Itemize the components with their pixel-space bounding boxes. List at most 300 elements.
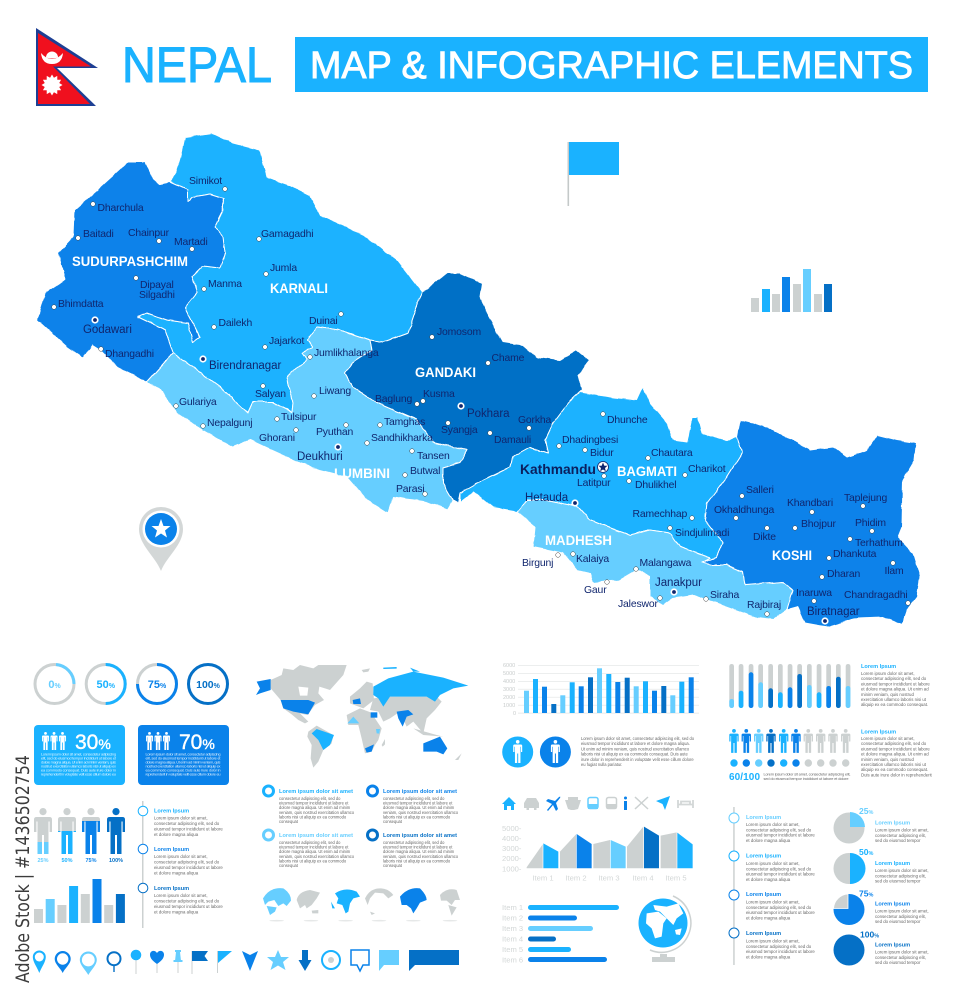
timeline: three steps: Lorem Ipsum bbox=[154, 847, 189, 853]
legend item 4 bbox=[368, 830, 459, 868]
timeline: four steps: consectetur adipiscing elit, sed do bbox=[746, 944, 812, 949]
city labels: Salleri bbox=[746, 485, 774, 496]
city labels: Siraha bbox=[710, 590, 740, 601]
banner: map and infographic elements: MAP & INFOGRAPHIC ELEMENTS bbox=[310, 45, 913, 87]
timeline: four steps: Lorem ipsum dolor sit amet, bbox=[746, 822, 800, 827]
timeline: four steps: et dolore magna aliqua bbox=[746, 954, 791, 959]
pie: 75 percent: Lorem ipsum dolor sit amet, bbox=[875, 908, 929, 914]
timeline: four steps: Lorem Ipsum bbox=[746, 854, 781, 860]
icon: dark flag bbox=[192, 951, 208, 974]
panel: 30 percent: elit, sed do eiusmod tempor incididunt ut labore et bbox=[41, 756, 117, 760]
pie: 100 percent bbox=[834, 930, 929, 966]
column chart: top middle: 6000 bbox=[503, 663, 515, 669]
icon: arrowhead marker bbox=[242, 951, 258, 971]
legend item 3: laboris nisi ut aliquip ex ea commodo bbox=[279, 858, 347, 863]
timeline: three steps: eiusmod tempor incididunt ut labore bbox=[154, 865, 223, 870]
city labels: Birgunj bbox=[522, 558, 553, 569]
legend item 2: dolore magna aliqua. Ut enim ad minim bbox=[383, 805, 455, 810]
legend item 3: Lorem ipsum dolor sit amet bbox=[279, 833, 353, 839]
legend item 2: eiusmod tempor incididunt ut labore et bbox=[383, 801, 453, 806]
icon: ship bbox=[565, 797, 581, 810]
pie: 50 percent: 50% bbox=[859, 847, 873, 857]
people pictogram: 60 of 100: Lorem ipsum dolor sit amet, consectetur adipiscing elit, bbox=[764, 772, 850, 776]
city labels bbox=[58, 176, 907, 611]
pie: 100 percent: sed do eiusmod tempor bbox=[875, 960, 921, 965]
legend item 4: dolore magna aliqua. Ut enim ad minim bbox=[383, 849, 455, 854]
male icons with paragraph: Lorem ipsum dolor sit amet, consectetur adipiscing elit, sed do bbox=[581, 736, 695, 741]
pie: 25 percent: consectetur adipiscing elit, bbox=[875, 833, 926, 838]
city labels: Baglung bbox=[375, 394, 412, 405]
pie: 100 percent: consectetur adipiscing elit, bbox=[875, 955, 926, 960]
panel: 70 percent: nostrud exercitation ullamco laboris nisi ut aliquip ex bbox=[146, 764, 221, 768]
area chart: 5000- bbox=[502, 824, 522, 833]
icon: heart pin bbox=[150, 951, 164, 973]
panel: 70 percent: dolore magna aliqua. Ut enim ad minim veniam, quis bbox=[146, 760, 221, 764]
province labels: BAGMATI bbox=[617, 464, 677, 479]
city labels: Kalaiya bbox=[576, 554, 609, 565]
city labels: Sindjulimadi bbox=[675, 528, 729, 539]
province labels: KOSHI bbox=[772, 548, 812, 563]
people pictogram: 60 of 100: Lorem Ipsum bbox=[861, 730, 896, 736]
capital labels: Godawari bbox=[83, 324, 132, 336]
timeline: four steps: Lorem Ipsum bbox=[746, 892, 781, 898]
pie: 50 percent: Lorem Ipsum bbox=[875, 861, 910, 867]
column chart: top middle bbox=[503, 663, 699, 717]
region: Koshi bbox=[702, 420, 920, 627]
city labels: Martadi bbox=[174, 237, 208, 248]
mini bar chart icon bbox=[751, 269, 832, 312]
legend item 1: Lorem ipsum dolor sit amet bbox=[279, 789, 353, 795]
icon: pin 3 bbox=[80, 952, 97, 975]
legend item 1: eiusmod tempor incididunt ut labore et bbox=[279, 801, 349, 806]
timeline: three steps: consectetur adipiscing elit, sed do bbox=[154, 898, 220, 904]
male icons with paragraph: laboris nisi ut aliquip ex ea commodo consequat. Duis aute bbox=[581, 752, 688, 757]
timeline: four steps: consectetur adipiscing elit, sed do bbox=[746, 827, 812, 832]
legend item 3: dolore magna aliqua. Ut enim ad minim bbox=[279, 849, 351, 854]
rounded column chart: top right: consectetur adipiscing elit, sed do bbox=[861, 676, 927, 681]
map of Nepal provinces bbox=[37, 133, 920, 627]
city labels: Terhathum bbox=[855, 538, 903, 549]
timeline: three steps: Lorem ipsum dolor sit amet, bbox=[154, 816, 208, 820]
area chart: Item 4 bbox=[632, 874, 654, 882]
people percentage chart: 100% bbox=[109, 858, 123, 864]
male icons with paragraph: Ut enim ad minim veniam, quis nostrud exercitation ullamco bbox=[581, 746, 690, 751]
ring: 75 percent: 75% bbox=[148, 679, 167, 691]
timeline: three steps: Lorem Ipsum bbox=[154, 886, 189, 892]
people pictogram: 60 of 100 bbox=[729, 729, 933, 783]
city labels: Manma bbox=[208, 279, 242, 290]
area chart: 4000- bbox=[502, 834, 522, 843]
legend item 4: eiusmod tempor incididunt ut labore et bbox=[383, 845, 453, 850]
timeline: four steps: Lorem Ipsum bbox=[746, 815, 781, 821]
icon: plane bbox=[546, 797, 560, 811]
vertical stock credit: Adobe Stock | #1436502754 bbox=[12, 755, 34, 983]
city labels: Chautara bbox=[651, 448, 693, 459]
pie: 75 percent: Lorem Ipsum bbox=[875, 902, 910, 908]
column chart: top middle: 3000 bbox=[503, 687, 515, 693]
bar chart: bottom left bbox=[34, 879, 125, 923]
rounded column chart: top right bbox=[729, 664, 930, 708]
city labels: Parasi bbox=[396, 484, 425, 495]
city labels: Dipayal bbox=[140, 280, 174, 291]
male icons with paragraph: eiusmod tempor incididunt ut labore et dolore magna aliqua. bbox=[581, 741, 690, 746]
city labels: Dhadingbesi bbox=[562, 435, 618, 446]
legend item 3: veniam, quis nostrud exercitation ullamco bbox=[279, 854, 355, 859]
legend item 2: laboris nisi ut aliquip ex ea commodo bbox=[383, 814, 451, 819]
pie: 75 percent: 75% bbox=[859, 888, 873, 898]
horizontal bar chart: Item 1 bbox=[502, 903, 523, 912]
legend item 4: veniam, quis nostrud exercitation ullamco bbox=[383, 854, 459, 859]
legend block: four text items bbox=[264, 786, 459, 868]
ring: 50 percent bbox=[86, 664, 125, 704]
city markers bbox=[52, 187, 910, 616]
column chart: top middle: 2000 bbox=[503, 695, 515, 701]
city labels: Okhaldhunga bbox=[714, 505, 775, 516]
timeline: three steps: et dolore magna aliqua bbox=[154, 832, 199, 837]
city labels: Kusma bbox=[423, 389, 455, 400]
people pictogram: 60 of 100: et dolore magna aliqua. Ut enim ad bbox=[861, 752, 929, 757]
timeline: four steps: et dolore magna aliqua bbox=[746, 915, 791, 920]
rounded column chart: top right: Lorem Ipsum bbox=[861, 664, 896, 670]
icon: outlined speech bubble bbox=[351, 950, 369, 971]
timeline: three steps: Lorem Ipsum bbox=[154, 808, 189, 814]
legend item 2 bbox=[368, 786, 459, 824]
capital labels: Hetauda bbox=[525, 492, 569, 504]
pie: 75 percent: sed do eiusmod tempor bbox=[875, 919, 921, 924]
legend item 4: consequat bbox=[383, 863, 403, 868]
ring: 50 percent: 50% bbox=[96, 679, 116, 691]
timeline: four steps: et dolore magna aliqua bbox=[746, 838, 791, 843]
legend item 1: veniam, quis nostrud exercitation ullamco bbox=[279, 810, 355, 815]
icon: fork and knife bbox=[635, 797, 648, 809]
panel: 70 percent bbox=[138, 725, 229, 785]
icon: national capital star bbox=[598, 462, 608, 472]
timeline: three steps: consectetur adipiscing elit, sed do bbox=[154, 860, 220, 864]
ring: 0 percent: 0% bbox=[48, 679, 61, 691]
city labels: Rajbiraj bbox=[747, 600, 781, 611]
region: Gandaki bbox=[345, 273, 590, 502]
city labels: Ilam bbox=[884, 566, 904, 577]
column chart: top middle: 1000 bbox=[503, 703, 515, 709]
panel: 30 percent bbox=[34, 725, 125, 785]
globe 6 bbox=[440, 889, 460, 916]
city labels: Tulsipur bbox=[281, 412, 317, 423]
pie: 75 percent: consectetur adipiscing elit, bbox=[875, 914, 926, 919]
legend item 2: Lorem ipsum dolor sit amet bbox=[383, 789, 457, 795]
legend item 2: consectetur adipiscing elit, sed do bbox=[383, 796, 445, 801]
icon: bed bbox=[678, 800, 693, 808]
horizontal bar chart: Item 4 bbox=[502, 934, 523, 944]
people pictogram: 60 of 100: Lorem ipsum dolor sit amet, bbox=[861, 736, 915, 741]
rounded column chart: top right: exercitation ullamco laboris nisi ut bbox=[861, 697, 927, 702]
pie: 50 percent: sed do eiusmod tempor bbox=[875, 878, 921, 884]
city labels: Baitadi bbox=[83, 229, 114, 240]
legend item 2: veniam, quis nostrud exercitation ullamco bbox=[383, 810, 459, 815]
region: Bagmati bbox=[460, 387, 742, 563]
people pictogram: 60 of 100: exercitation ullamco laboris nisi ut bbox=[861, 762, 927, 767]
capital labels bbox=[83, 324, 860, 618]
city labels: Ramechhap bbox=[632, 509, 688, 520]
icon: navigation arrow bbox=[656, 796, 670, 810]
horizontal bar chart: Item 5 bbox=[502, 945, 523, 954]
city labels: Bhojpur bbox=[801, 519, 836, 530]
panel: 30 percent: 30% bbox=[75, 731, 111, 754]
legend item 3: consectetur adipiscing elit, sed do bbox=[279, 840, 341, 845]
panel: 30 percent: nostrud exercitation ullamco laboris nisi ut aliquip ex bbox=[41, 764, 116, 768]
icon: down arrow bbox=[298, 950, 312, 971]
globe 4 bbox=[365, 888, 393, 915]
city labels: Pyuthan bbox=[316, 427, 353, 438]
city labels: Dhankuta bbox=[833, 549, 877, 560]
pie: 100 percent: 100% bbox=[860, 930, 879, 940]
horizontal bar chart: Item 3 bbox=[502, 924, 523, 933]
pie: 25 percent: sed do eiusmod tempor bbox=[875, 838, 921, 843]
icon: thumbtack bbox=[174, 950, 182, 973]
city labels: Dhangadhi bbox=[105, 349, 154, 360]
timeline: four steps: Lorem ipsum dolor sit amet, bbox=[746, 900, 800, 904]
pie: 25 percent: Lorem ipsum dolor sit amet, bbox=[875, 828, 929, 832]
male icons with paragraph: eu fugiat nulla pariatur. bbox=[581, 762, 622, 767]
globe 2 bbox=[297, 890, 320, 913]
timeline: three steps: Lorem ipsum dolor sit amet, bbox=[154, 854, 208, 859]
city labels: Jajarkot bbox=[269, 336, 304, 347]
horizontal bar chart: Item 2 bbox=[502, 914, 523, 922]
icon: man circle 1 bbox=[502, 736, 533, 768]
timeline: four steps: Lorem ipsum dolor sit amet, bbox=[746, 938, 800, 944]
city labels: Ghorani bbox=[259, 433, 295, 444]
city labels: Sandhikharka bbox=[371, 433, 433, 444]
timeline: four steps: eiusmod tempor incididunt ut labore bbox=[746, 833, 815, 838]
icon: car bbox=[524, 798, 539, 810]
ring: 100 percent bbox=[188, 664, 228, 704]
timeline: four steps bbox=[729, 807, 815, 965]
city labels: Simikot bbox=[189, 176, 222, 187]
globe 1 bbox=[263, 888, 291, 915]
city labels: Butwal bbox=[410, 466, 440, 477]
city labels: Inaruwa bbox=[796, 588, 832, 599]
people pictogram: 60 of 100: sed do eiusmod tempor incididunt ut labore et dolore bbox=[764, 776, 848, 781]
legend item 3: consequat bbox=[279, 863, 299, 868]
progress rings bbox=[35, 664, 228, 704]
column chart: top middle: 4000 bbox=[503, 679, 515, 685]
city labels: Jaleswor bbox=[618, 599, 658, 610]
icon: man circle 2 bbox=[540, 736, 571, 768]
timeline: three steps: et dolore magna aliqua bbox=[154, 870, 199, 876]
icon: light pennant flag bbox=[217, 951, 232, 973]
panel: 70 percent: ea commodo consequat. Duis aute irure dolor in bbox=[146, 768, 220, 772]
capital labels: Birendranagar bbox=[209, 360, 281, 372]
flag of Nepal bbox=[36, 28, 98, 106]
legend item 1: consequat bbox=[279, 819, 299, 824]
male icons with paragraph: irure dolor in reprehenderit in voluptate velit esse cillum dolore bbox=[581, 757, 694, 762]
panel: 30 percent: reprehenderit in voluptate velit esse cillum dolore eu bbox=[41, 772, 116, 776]
panel: 30 percent: ea commodo consequat. Duis aute irure dolor in bbox=[41, 768, 116, 772]
timeline: four steps: Lorem Ipsum bbox=[746, 931, 781, 937]
legend item 4: laboris nisi ut aliquip ex ea commodo bbox=[383, 858, 451, 863]
ring: 75 percent bbox=[138, 664, 176, 704]
pie: 25 percent: 25% bbox=[859, 806, 873, 816]
icon: desk globe bbox=[638, 896, 691, 962]
region: Karnali bbox=[138, 133, 422, 413]
rounded column chart: top right: eiusmod tempor incididunt ut labore bbox=[861, 681, 930, 686]
city labels: Chame bbox=[492, 353, 525, 364]
legend item 4: consectetur adipiscing elit, sed do bbox=[383, 840, 445, 845]
city labels: Tamghas bbox=[384, 417, 425, 428]
world map bbox=[256, 665, 468, 768]
city labels: Chandragadhi bbox=[844, 590, 907, 601]
icon: house bbox=[502, 797, 516, 810]
region: Madhesh bbox=[517, 500, 793, 620]
timeline: three steps: eiusmod tempor incididunt ut labore bbox=[154, 826, 223, 832]
panel: 70 percent: 70% bbox=[179, 731, 215, 754]
legend item 4: Lorem ipsum dolor sit amet bbox=[383, 833, 457, 839]
provincial capital markers bbox=[91, 316, 829, 625]
area chart: 2000- bbox=[502, 854, 522, 863]
icon: location pin with star bbox=[139, 507, 183, 571]
timeline: four steps: eiusmod tempor incididunt ut labore bbox=[746, 872, 815, 877]
pie: 50 percent: consectetur adipiscing elit, bbox=[875, 873, 926, 878]
timeline: three steps bbox=[138, 801, 223, 928]
province labels bbox=[72, 254, 812, 563]
globe 3 bbox=[331, 890, 360, 913]
timeline: four steps: eiusmod tempor incididunt ut labore bbox=[746, 910, 815, 915]
timeline: four steps: consectetur adipiscing elit, sed do bbox=[746, 866, 812, 871]
icon: bus bbox=[588, 798, 598, 809]
pie charts bbox=[834, 806, 929, 966]
city labels: Bhimdatta bbox=[58, 299, 104, 310]
timeline: three steps: et dolore magna aliqua bbox=[154, 910, 199, 914]
rounded column chart: top right: et dolore magna aliqua. Ut enim ad bbox=[861, 687, 929, 692]
people pictogram: 60 of 100: Duis aute irure dolor in reprehenderit bbox=[861, 772, 933, 777]
province labels: GANDAKI bbox=[415, 365, 476, 380]
capital labels: Biratnagar bbox=[807, 606, 860, 618]
globe shadows bbox=[269, 920, 457, 921]
area chart: 3000- bbox=[502, 844, 522, 853]
horizontal bar chart bbox=[502, 903, 619, 964]
legend item 1: consectetur adipiscing elit, sed do bbox=[279, 796, 341, 801]
capital labels: Deukhuri bbox=[297, 451, 343, 463]
area chart: Item 1 bbox=[532, 874, 554, 882]
city labels: Dharchula bbox=[98, 203, 144, 214]
pie: 50 percent: Lorem ipsum dolor sit amet, bbox=[875, 868, 929, 873]
ring: 0 percent bbox=[35, 664, 74, 704]
icon: target bbox=[322, 951, 340, 969]
people percentage chart: 75% bbox=[85, 858, 97, 864]
icon: pin 4 bbox=[108, 952, 120, 972]
city labels: Nepalgunj bbox=[207, 418, 252, 429]
city labels: Jumla bbox=[270, 263, 297, 274]
male icons with paragraph bbox=[502, 736, 695, 768]
legend item 1: laboris nisi ut aliquip ex ea commodo bbox=[279, 814, 347, 819]
city labels: Chainpur bbox=[128, 228, 170, 239]
title: country name: NEPAL bbox=[122, 37, 272, 93]
rounded column chart: top right: Lorem ipsum dolor sit amet, bbox=[861, 671, 915, 676]
region: Sudurpashchim bbox=[37, 162, 225, 382]
legend item 3 bbox=[264, 830, 355, 868]
pie: 25 percent bbox=[834, 806, 929, 844]
city labels: Damauli bbox=[494, 435, 531, 446]
city labels: Gamagadhi bbox=[261, 229, 313, 240]
city labels: Dailekh bbox=[218, 318, 252, 329]
pie: 100 percent: Lorem Ipsum bbox=[875, 942, 910, 948]
timeline: four steps: et dolore magna aliqua bbox=[746, 877, 791, 882]
pie: 100 percent: Lorem ipsum dolor sit amet, bbox=[875, 950, 929, 954]
timeline: three steps: eiusmod tempor incididunt ut labore bbox=[154, 904, 223, 909]
city labels: Khandbari bbox=[787, 498, 833, 509]
people pictogram: 60 of 100: minim veniam, quis nostrud bbox=[861, 757, 914, 762]
people pictogram: 60 of 100: aliquip ex ea commodo consequat. bbox=[861, 767, 928, 772]
timeline: three steps: Lorem ipsum dolor sit amet, bbox=[154, 893, 208, 898]
pie: 75 percent bbox=[834, 888, 929, 925]
globes row bbox=[263, 888, 460, 921]
city labels: Malangawa bbox=[640, 558, 692, 569]
city labels: Phidim bbox=[855, 518, 886, 529]
city labels: Gaur bbox=[584, 585, 607, 596]
people percentage chart: 25% bbox=[37, 858, 49, 864]
legend item 1: dolore magna aliqua. Ut enim ad minim bbox=[279, 805, 351, 810]
legend item 2: consequat bbox=[383, 819, 403, 824]
city labels: Taplejung bbox=[844, 493, 888, 504]
icon: star bbox=[267, 950, 289, 970]
panel: 30 percent: dolore magna aliqua. Ut enim ad minim veniam, quis bbox=[41, 760, 116, 764]
legend item 3: eiusmod tempor incididunt ut labore et bbox=[279, 845, 349, 850]
city labels: Syangja bbox=[441, 425, 478, 436]
transport icons row bbox=[502, 796, 693, 811]
people pictogram: 60 of 100: consectetur adipiscing elit, sed do bbox=[861, 741, 927, 746]
city labels: Duinai bbox=[309, 316, 338, 327]
city labels: Jumlikhalanga bbox=[314, 348, 379, 359]
timeline: four steps: consectetur adipiscing elit, sed do bbox=[746, 905, 812, 910]
city labels: Gulariya bbox=[179, 397, 217, 408]
pie: 25 percent: Lorem Ipsum bbox=[875, 820, 910, 826]
city labels: Dhunche bbox=[607, 415, 648, 426]
icon: light speech bubble bbox=[379, 950, 399, 971]
city labels: Latitpur bbox=[577, 478, 611, 489]
area chart: 1000- bbox=[502, 864, 522, 874]
panel: 70 percent: elit, sed do eiusmod tempor incididunt ut labore et bbox=[146, 756, 221, 760]
panel: 30 percent: Lorem ipsum dolor sit amet, consectetur adipiscing bbox=[41, 752, 116, 756]
city labels: Silgadhi bbox=[139, 290, 175, 301]
city labels: Tansen bbox=[417, 451, 450, 462]
city labels: Salyan bbox=[255, 389, 286, 400]
icon: pin 1 bbox=[33, 950, 46, 973]
capital labels: Janakpur bbox=[655, 577, 702, 589]
people pictogram: 60 of 100: 60/100 bbox=[729, 772, 760, 783]
city labels: Gorkha bbox=[518, 415, 552, 426]
rounded column chart: top right: minim veniam, quis nostrud bbox=[861, 692, 914, 697]
area chart: Item 5 bbox=[665, 874, 687, 882]
legend item 1 bbox=[264, 786, 355, 824]
rounded column chart: top right: aliquip ex ea commodo consequat. bbox=[861, 702, 928, 707]
area chart: Item 2 bbox=[565, 874, 587, 882]
icon: round pin bbox=[131, 950, 141, 974]
people percentage chart: 50% bbox=[61, 858, 73, 864]
province labels: LUMBINI bbox=[334, 466, 390, 481]
map pins row bbox=[33, 950, 459, 975]
people pictogram: 60 of 100: eiusmod tempor incididunt ut labore bbox=[861, 746, 930, 751]
icon: flag on pole bbox=[568, 142, 619, 206]
globe 5 bbox=[400, 888, 427, 913]
city labels: Dikte bbox=[753, 532, 776, 543]
province labels: KARNALI bbox=[270, 281, 328, 296]
label: Kathmandu: Kathmandu bbox=[520, 461, 596, 477]
region: Lumbini bbox=[147, 327, 467, 513]
timeline: four steps: eiusmod tempor incididunt ut labore bbox=[746, 949, 815, 954]
pie: 50 percent bbox=[834, 847, 929, 884]
province labels: MADHESH bbox=[545, 533, 612, 548]
city labels: Dharan bbox=[827, 569, 861, 580]
city labels: Jomosom bbox=[437, 327, 481, 338]
